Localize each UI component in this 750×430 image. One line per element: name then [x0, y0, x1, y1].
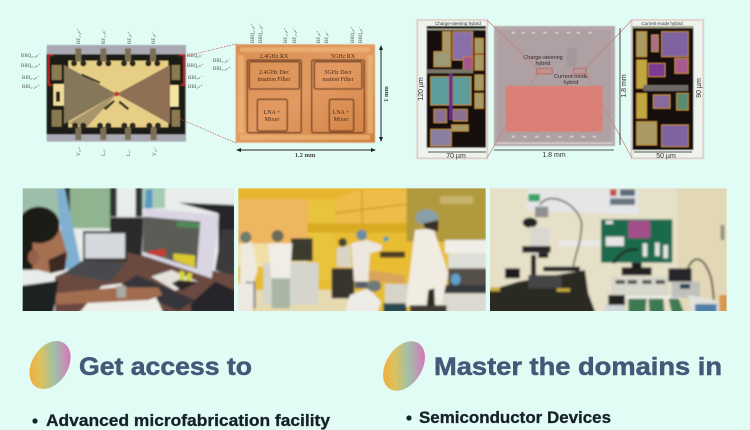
icon: wafer right	[374, 334, 434, 398]
board labels: BBI₂.₄ₙ⁻	[213, 59, 231, 64]
board labels: BBI₂.₄ₙ⁺	[22, 84, 40, 90]
board labels: BBQ₂.₄ₙ⁺	[21, 63, 41, 69]
chip callout: hybrid: hybrid	[536, 61, 550, 67]
board labels: V₁ₒ₋	[153, 146, 158, 156]
chip text labels: LNA +	[333, 110, 350, 116]
bullet item: microfabrication: Advanced microfabrication facility	[46, 411, 331, 430]
bullet item: semiconductor devices: Semiconductor Devices	[419, 408, 611, 427]
board labels	[21, 28, 231, 156]
panel: current-mode hybrid layout	[632, 20, 703, 158]
connector: dashed zoom lines	[178, 44, 236, 143]
panel: orange chip micrograph	[236, 44, 375, 143]
board labels: BBI₅ₙ⁻	[188, 76, 203, 81]
chip text labels: LNA +	[264, 110, 281, 116]
connector: layout zoom lines	[487, 20, 632, 158]
panel: charge-steering hybrid layout	[417, 20, 487, 158]
photo: engineer at monitor	[22, 188, 234, 311]
chip text labels: RF₂.₄ₙ⁻	[293, 27, 298, 43]
panel: full chip micrograph with pink block	[494, 26, 615, 146]
chip text labels: RF₅ₙ⁺	[316, 30, 322, 43]
board labels: V₁ₒ₊	[77, 146, 82, 156]
layout dimension labels: Current-mode hybrid	[641, 21, 683, 26]
layout dimension labels: Charge-steering hybrid	[435, 21, 481, 26]
panel: RF test board photo	[47, 45, 186, 142]
layout dimension labels	[418, 21, 703, 160]
chip callout: current-mode hybrid: Current-mode	[554, 74, 588, 80]
board labels: Lₒ₋	[127, 149, 132, 156]
icon: wafer left	[21, 333, 79, 397]
chip text labels	[250, 23, 364, 123]
board labels: Lₒ₊	[102, 149, 107, 156]
dimension: 1.2 mm width	[236, 148, 376, 159]
chip callout: charge-steering hybrid: Charge-steering	[523, 55, 563, 61]
heading: master the domains in: Master the domains in	[434, 353, 722, 381]
chip text labels: 5GHz Deci	[324, 70, 352, 76]
chip text labels: Mixer	[265, 117, 279, 123]
chip text labels: 2.4GHz Dec	[259, 70, 289, 76]
chip text labels: BBQ₅ₙ⁻	[359, 26, 364, 43]
chip callout: hybrid second line: hybrid	[564, 80, 578, 86]
layout dimension labels: 70 µm	[446, 153, 466, 160]
board labels: BBI₂.₄ₙ⁺	[213, 66, 231, 72]
board labels: BBQ₂.₄ₙ⁻	[21, 54, 41, 59]
chip text labels: Mixer	[334, 117, 348, 123]
layout dimension labels: 1.8 mm	[542, 152, 566, 159]
board labels: BBI₂.₄ₙ⁻	[22, 76, 40, 81]
board labels: BBQ₅ₙ⁺	[187, 63, 204, 69]
chip text labels: RF₅ₙ⁻	[325, 30, 330, 43]
board labels: BBQ₅ₙ⁻	[187, 54, 204, 59]
chip text labels: BBQ₂.₄ₙ⁺	[250, 23, 256, 43]
layout dimension labels: 1.8 mm	[621, 74, 628, 98]
dimension: 1 mm height: 1 mm	[383, 86, 390, 102]
dimension: 1 mm height	[379, 45, 390, 142]
chip text labels: 5GHz RX	[331, 54, 356, 60]
chip text labels: RF₂.₄ₙ⁺	[283, 27, 289, 43]
layout dimension labels: 50 µm	[656, 153, 676, 160]
chip text labels: BBQ₅ₙ⁺	[350, 26, 356, 43]
board labels: RF₂.₄ₙ⁺	[76, 28, 82, 44]
chip text labels: 2.4GHz RX	[260, 54, 289, 60]
board labels: BBI₅ₙ⁺	[188, 84, 203, 90]
board labels: RF₅ₙ⁻	[152, 31, 157, 44]
layout dimension labels: 90 µm	[696, 78, 703, 98]
chip text labels: mation Filter	[322, 77, 354, 83]
board labels: RF₅ₙ⁺	[127, 31, 133, 44]
chip text labels: BBQ₂.₄ₙ⁻	[259, 23, 264, 43]
board labels: RF₂.₄ₙ⁻	[102, 28, 107, 44]
photo: cleanroom lab with yellow lighting	[238, 188, 486, 311]
layout dimension labels: 120 µm	[418, 77, 425, 101]
heading: get access to: Get access to	[79, 353, 252, 381]
dimension: 1.2 mm width: 1.2 mm	[295, 152, 316, 159]
chip text labels: imation Filter	[258, 77, 290, 83]
photo: probe station and microscope	[490, 188, 727, 311]
